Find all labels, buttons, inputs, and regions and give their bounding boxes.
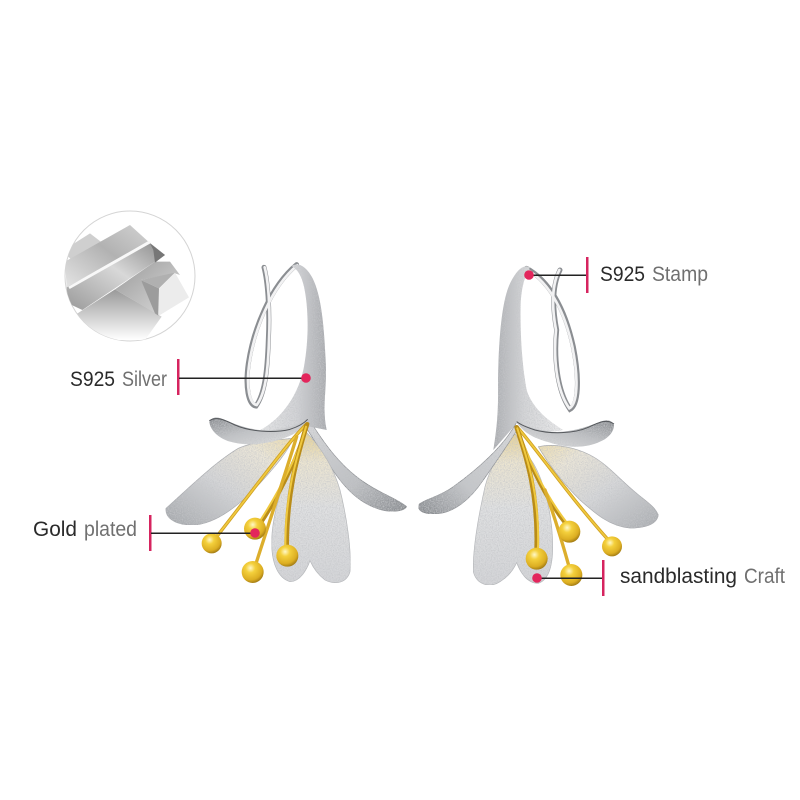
left earring [166, 264, 407, 583]
hook wire [247, 265, 297, 406]
stamens [517, 427, 608, 570]
callout: Gold plated: Gold [33, 518, 77, 541]
centre petal [473, 432, 553, 585]
left arm petal [419, 423, 516, 514]
flap edge [517, 421, 614, 433]
left petal [166, 438, 293, 525]
callout: Gold plated [33, 515, 260, 551]
back flap [209, 418, 308, 444]
callout: S925 Silver: Silver [122, 368, 167, 391]
hook wire [526, 268, 577, 409]
callout: S925 Stamp: Stamp [652, 263, 708, 286]
stem [493, 266, 563, 450]
flap edge [209, 419, 308, 431]
stamens [217, 424, 307, 567]
right wide petal [538, 445, 658, 528]
back flap [517, 420, 614, 447]
gold balls [526, 521, 622, 586]
gold balls [202, 518, 298, 583]
icon: silver ingots in circle [65, 211, 195, 341]
callout: sandblasting Craft: sandblasting [620, 565, 737, 588]
callout: sandblasting Craft: Craft [744, 565, 785, 588]
centre petal [272, 432, 350, 583]
right earring [419, 266, 658, 586]
callout: S925 Stamp [524, 257, 708, 293]
callout: S925 Silver [70, 359, 311, 395]
callout: Gold plated: plated [84, 518, 137, 541]
callout: S925 Stamp: S925 [600, 263, 645, 286]
callout: sandblasting Craft [532, 560, 785, 596]
right arm petal [307, 418, 407, 511]
callout: S925 Silver: S925 [70, 368, 115, 391]
stem [260, 264, 327, 432]
